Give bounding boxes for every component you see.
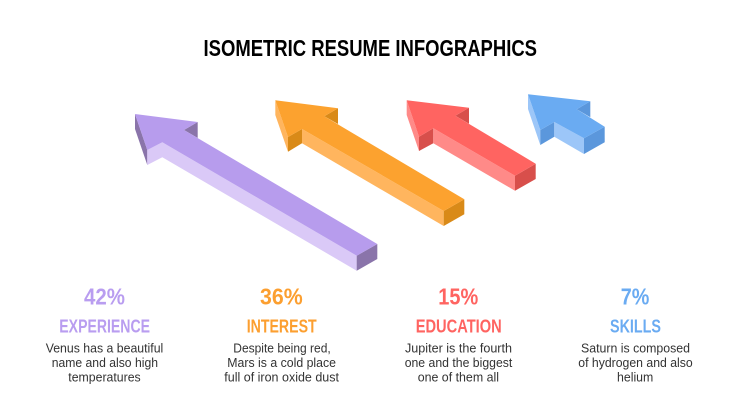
- heading: skills: SKILLS: [610, 316, 661, 337]
- description: interest: Despite being red,: [233, 341, 331, 355]
- column: education: [405, 283, 513, 385]
- description: interest: full of iron oxide dust: [224, 371, 340, 385]
- title: ISOMETRIC RESUME INFOGRAPHICS: [204, 35, 537, 61]
- description: skills: helium: [617, 371, 653, 385]
- heading: interest: INTEREST: [247, 316, 317, 337]
- description: skills: Saturn is composed: [581, 341, 690, 355]
- column: interest: [224, 283, 340, 385]
- description: experience: name and also high: [52, 356, 158, 370]
- description: experience: [46, 341, 163, 385]
- arrow: experience (purple): [135, 114, 377, 271]
- description: education: [405, 341, 513, 385]
- description: interest: Mars is a cold place: [227, 356, 336, 370]
- percentage: 15%: 15%: [438, 283, 478, 309]
- arrow: education (red): [407, 100, 536, 191]
- description: interest: [224, 341, 340, 385]
- heading: education: EDUCATION: [416, 316, 502, 337]
- description: experience: Venus has a beautiful: [46, 341, 163, 355]
- percentage: 42%: 42%: [84, 283, 125, 309]
- heading: experience: EXPERIENCE: [59, 316, 150, 337]
- description: skills: of hydrogen and also: [578, 356, 693, 370]
- arrow: skills (blue): [528, 94, 605, 154]
- arrow: interest (orange): [275, 100, 464, 226]
- description: education: one and the biggest: [405, 356, 513, 370]
- percentage: 36%: 36%: [260, 283, 303, 309]
- description: skills: [578, 341, 693, 385]
- column: experience: [46, 283, 163, 385]
- percentage: 7%: 7%: [621, 283, 649, 309]
- column: skills: [578, 283, 693, 385]
- description: education: Jupiter is the fourth: [405, 341, 512, 355]
- description: education: one of them all: [418, 371, 499, 385]
- description: experience: temperatures: [68, 371, 141, 385]
